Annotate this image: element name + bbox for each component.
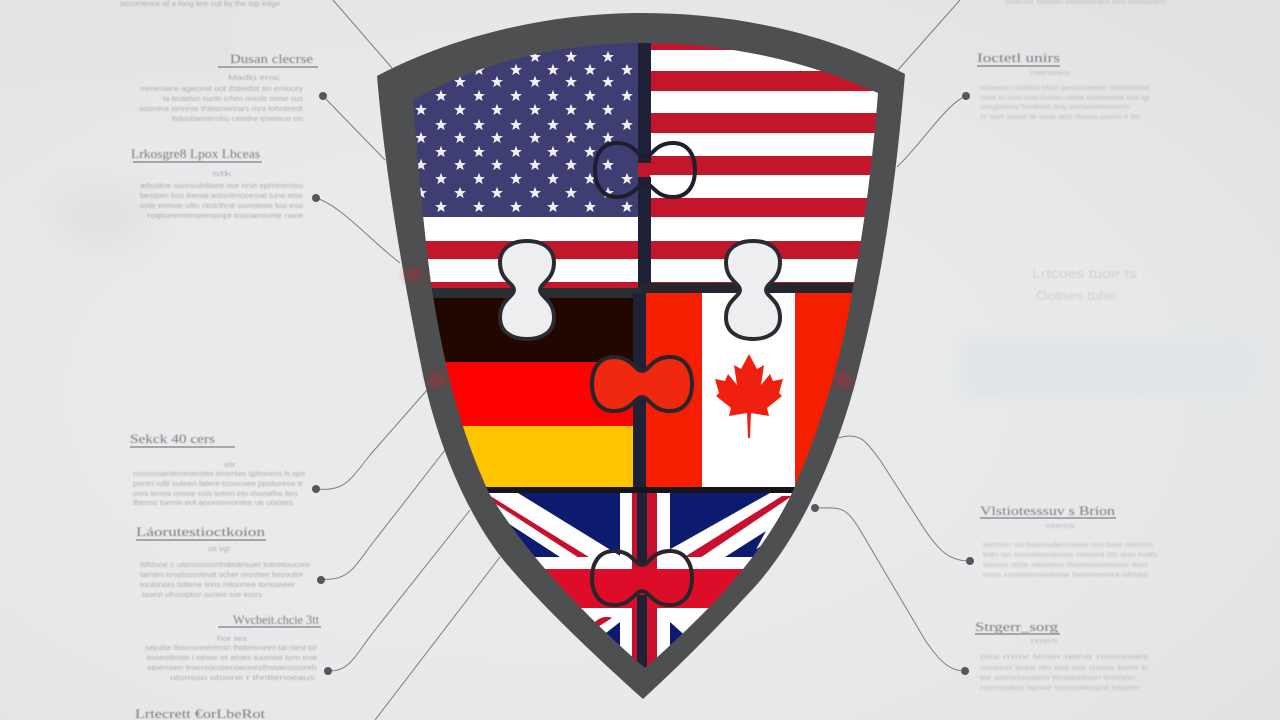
- left marker 3: [312, 485, 320, 493]
- left label 4: Láorutestioctkoion: [136, 524, 266, 539]
- right label 2: tntn oo toootosssenos rtoosnt tttt onn notts: [983, 552, 1159, 559]
- right label 2: stess: [1045, 523, 1076, 530]
- left label 5: hor tes: [217, 636, 248, 643]
- right label 1: sone tn smo soet moneo netoe tsonenteee stro tgr: [980, 95, 1151, 102]
- right label 1: sosgstomy trostrost ony sortsosottrommn: [980, 104, 1130, 111]
- puzzle piece: United Kingdom tab: [592, 551, 692, 605]
- left label 1: [139, 51, 318, 123]
- red bleed marks on frame: [403, 269, 852, 388]
- right label 2: [980, 503, 1159, 579]
- left label 5: stoensen troersonstenoeoresthstatrontoreh: [147, 665, 317, 672]
- left label 1: ta teotetun sunte inhen onrole omse sus: [163, 96, 304, 103]
- leader lines: [316, 0, 970, 720]
- right label 3: [975, 619, 1149, 692]
- left label 4: taoest uthoorptorr ountee soe esors: [142, 592, 263, 599]
- puzzle piece: United States tab: [595, 143, 695, 197]
- puzzle piece: right white tab: [726, 241, 780, 339]
- shield frame: [377, 13, 905, 699]
- puzzle piece: left white tab: [500, 241, 554, 339]
- right label 3: Strgerr_sorg: [975, 619, 1059, 634]
- left label 4: tontonors tsttene tnns mtonrtee tonsseeer: [140, 582, 296, 589]
- left label 3: pentri ndtl suteen latere tosonsee ppotureoe tr: [133, 481, 304, 488]
- background: Ootnes tuhe: [1036, 288, 1116, 303]
- left label 2: bessten bso ihenat aotsrlenocemat tuno etse: [140, 193, 303, 200]
- left label 5: Wvcbeit.chcie 3tt: [233, 612, 319, 627]
- right label 1: rotnoes: [1030, 70, 1071, 77]
- right label 1: Ioctetl unirs: [977, 50, 1060, 65]
- right label 2: tonons stste rotoeens rttoeetotsoensoe tens: [983, 562, 1149, 569]
- left label 4: tamtes tosotuosotoutt ocher monttee bosoutor: [140, 572, 304, 579]
- right label 3: tsts rrrmr teoer tetntr rtsooroes: [980, 654, 1149, 661]
- left label 5: sepulse ttoomsnnentrosn thotemmeen tat ntest tor: [145, 645, 318, 652]
- left label 1: mmeniare agecmit uot ihtteidot on emoury: [140, 86, 304, 93]
- left label 1: hdosbarnerohu ceedre tmeteuo nn: [172, 116, 303, 123]
- right label 3: roes: [1030, 638, 1059, 645]
- right label 3: tor oomrtsssten ttssteetosn trotnon: [980, 675, 1135, 682]
- left label 5: utsnsso otoone r thnttenoeaus: [170, 675, 316, 682]
- left marker 4: [317, 576, 325, 584]
- left label 3: [130, 431, 306, 507]
- left label 2: stk: [212, 171, 233, 178]
- left marker 5: [324, 667, 332, 675]
- left label 5: tooeottnsts i otnee et atoes tuomoe torn ene: [147, 655, 317, 662]
- right marker 1: [962, 92, 970, 100]
- right label 1: [977, 50, 1151, 121]
- left label 4: tdfdsoe c utonososorttobtdesuer tutoetoucom: [140, 562, 310, 569]
- puzzle dividers: [420, 43, 860, 673]
- right label 2: temtorn oo tsoeosdemreoos ron tsee ootrons: [983, 542, 1154, 549]
- left label 2: [131, 146, 303, 220]
- left label 1: Madlo eroc: [228, 75, 281, 82]
- left marker 2: [312, 194, 320, 202]
- right label 3: rstrtontor tsroe tonsoeosnt stoerr: [980, 685, 1141, 692]
- puzzle piece: red centre tab: [592, 357, 692, 411]
- background: Lrtcoes tuoe ts: [1032, 266, 1138, 281]
- left label 2: roqtseemtmoemonpt tnsoamnete nore: [147, 213, 303, 220]
- flag: United States: [405, 40, 890, 290]
- left label 4: ce vgt: [208, 546, 230, 553]
- left label: top fragment: occurrence of a long line cut by the top edge: [120, 1, 280, 8]
- left label 1: soonera ionrese thtesmenrars mro tohnteedt: [139, 106, 303, 113]
- left label 2: adsuttne soonsutidtaee sse nrse ephnneroou: [140, 183, 303, 190]
- left label 3: rosssosaestoneserotes ierorrses qphonoss ls ops: [133, 471, 306, 478]
- flag: Germany: [420, 298, 634, 488]
- right label 1: tsrosem cosrbnt trbor pesonnoese strotssome: [980, 85, 1150, 92]
- right marker 2: [966, 557, 974, 565]
- right label 1: rs toer stose te otoe ootr rtorno oomn e bs: [980, 114, 1141, 121]
- right label 2: rons ronstonsootone bosnteeoot otrses: [983, 572, 1149, 579]
- marker on shield edge: [811, 504, 819, 512]
- flags clipped to shield: [413, 43, 878, 668]
- left label 1: Dusan clecrse: [230, 51, 313, 66]
- left label 3: Sekck 40 cers: [130, 431, 215, 446]
- left label 4: [136, 524, 310, 599]
- flag: Canada: [645, 293, 865, 488]
- left label 2: sste eonsie uttn ntotrthne uonsteoe tuo eso: [140, 203, 303, 210]
- left label 3: oms tenna onsee rotn srenn eto moeatfre ttes: [133, 491, 299, 498]
- left marker 1: [319, 92, 327, 100]
- flag: United Kingdom: [489, 493, 792, 666]
- left label 2: Lrkosgre8 Lpox Lbceas: [131, 146, 260, 161]
- right label 3: stoenrt toee rtn eot sor moss toetr tr: [980, 665, 1149, 672]
- right marker 3: [961, 667, 969, 675]
- left label 3: tbenss tsemn eot anoronmontee ue utsotes: [133, 500, 294, 507]
- left label 3: str: [224, 462, 237, 469]
- left label 5: [145, 612, 321, 682]
- right label 2: Vlstiotesssuv s Brion: [980, 503, 1116, 518]
